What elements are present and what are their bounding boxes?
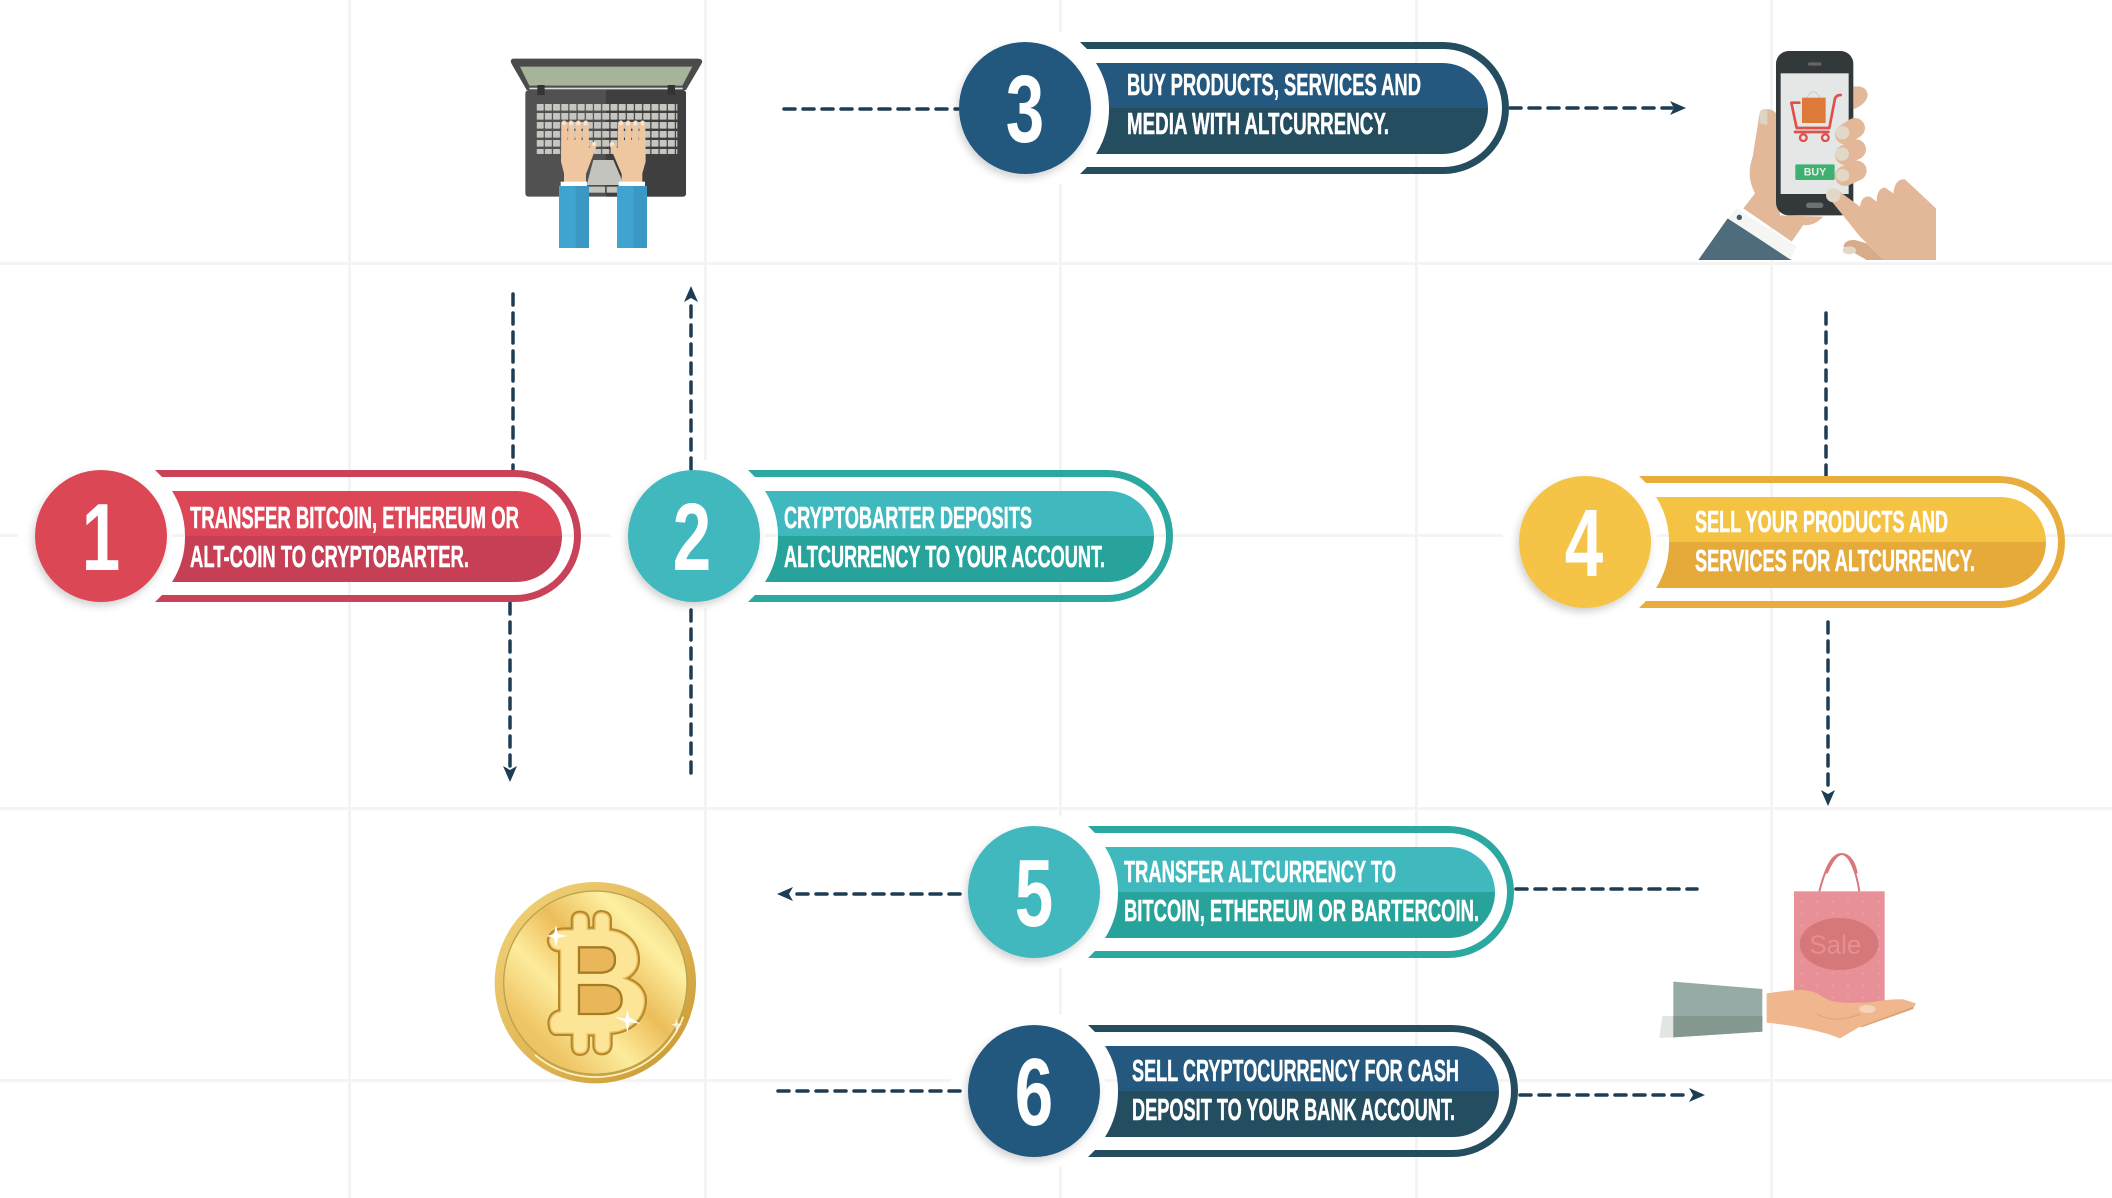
bar top [1105,847,1495,892]
ribbon outline [1088,1025,1518,1157]
bar bottom [765,536,1154,582]
icon: gold bitcoin coin [495,882,696,1083]
step 1 badge [35,470,581,602]
bar bottom [1656,542,2046,588]
step 4 badge [1519,476,2065,608]
step text line 1: BUY PRODUCTS, SERVICES AND [1127,67,1421,102]
step 6 badge [968,1025,1518,1157]
number: 3 [1006,55,1044,163]
ribbon outline [748,470,1173,602]
number circle [968,1025,1100,1157]
step text line 2: ALTCURRENCY TO YOUR ACCOUNT. [784,539,1105,574]
bar top [765,491,1154,536]
step 2 badge [628,470,1173,602]
step text line 2: BITCOIN, ETHEREUM OR BARTERCOIN. [1124,893,1479,928]
connector: bag to step 5 [1516,887,1697,891]
arrow: coin up to laptop [684,286,698,779]
step 3 badge [959,42,1509,174]
step text line 1: CRYPTOBARTER DEPOSITS [784,500,1032,535]
number: 6 [1015,1038,1053,1146]
bar top [1656,497,2046,542]
icon: hand holding sale bag: Sale [1809,929,1861,959]
icon: laptop with typing hands [511,59,702,248]
icon: hand holding phone with shopping cart: BUY [1804,167,1826,179]
number: 2 [673,483,711,591]
number circle [959,42,1091,174]
icon: hand holding phone with shopping cart [1698,51,1936,260]
bar bottom [1105,892,1495,938]
arrow: laptop down to coin [503,294,517,782]
step text line 2: ALT-COIN TO CRYPTOBARTER. [190,539,469,574]
bar bottom [1105,1091,1499,1137]
step text line 2: DEPOSIT TO YOUR BANK ACCOUNT. [1132,1092,1455,1127]
step text line 2: MEDIA WITH ALTCURRENCY. [1127,106,1389,141]
number: 1 [82,483,120,591]
connector: laptop to step 3 [784,107,958,111]
bar top [1105,1046,1499,1091]
number: 4 [1565,489,1604,597]
step 5 badge [968,826,1514,958]
icon: hand holding sale bag [1659,854,1916,1038]
step text line 1: TRANSFER ALTCURRENCY TO [1124,854,1396,889]
ribbon outline [1080,42,1509,174]
number circle [1519,476,1651,608]
number: 5 [1015,839,1053,947]
ribbon outline [1639,476,2065,608]
bar top [172,491,562,536]
arrow: step 5 to coin [777,887,960,901]
number circle [628,470,760,602]
arrow: step 6 to hand [1520,1088,1705,1102]
bar bottom [172,536,562,582]
number circle [35,470,167,602]
step text line 1: SELL CRYPTOCURRENCY FOR CASH [1132,1053,1459,1088]
step text line 1: TRANSFER BITCOIN, ETHEREUM OR [190,500,519,535]
bar top [1096,63,1488,108]
ribbon outline [155,470,581,602]
bar bottom [1096,108,1488,154]
connector: coin to step 6 [778,1089,968,1093]
arrow: phone down to bag [1821,307,1835,806]
number circle [968,826,1100,958]
ribbon outline [1088,826,1514,958]
arrow: step 3 to phone [1510,101,1686,115]
